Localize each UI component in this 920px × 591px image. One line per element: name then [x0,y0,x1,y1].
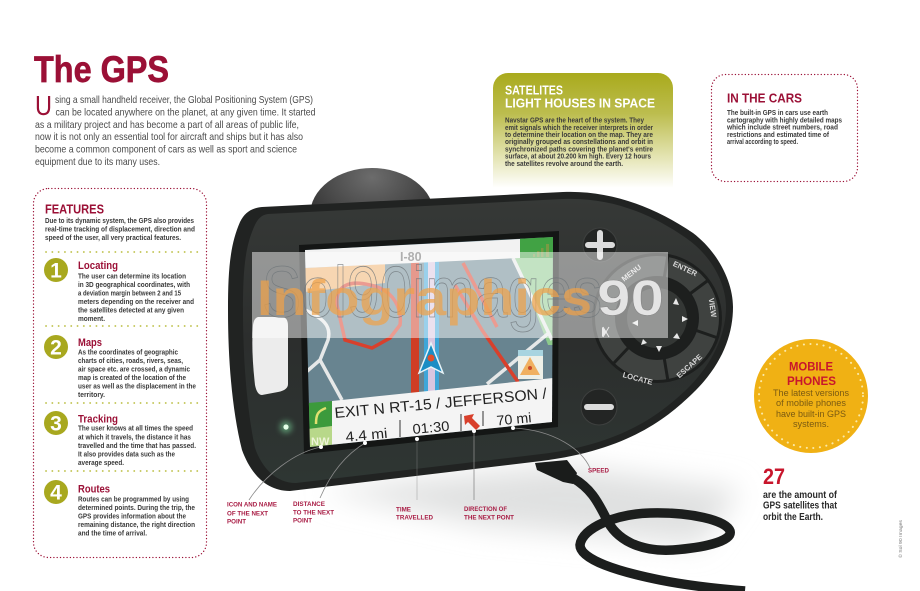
panel: in the cars: The built-in GPS in cars use earth [727,108,828,117]
label: distance: DISTANCE [293,501,326,508]
feature 1: locating: 1 [50,260,62,282]
label: direction: THE NEXT PONT [464,514,514,521]
intro text block: equipment due to its many uses. [35,157,160,168]
feature 1: locating: a deviation margin between 2 and 15 [78,288,181,298]
control dial: LOCATE [622,370,654,387]
watermark band: 90 [597,270,664,326]
label: distance [293,501,334,525]
position arrow [419,343,443,373]
feature 1: locating: moment. [78,314,105,323]
feature 3: tracking [44,411,196,467]
intro text block: can be located anywhere on the planet, at any given time. It started [56,108,316,118]
callout: mobile phones: have built-in GPS [776,409,846,420]
label: time travelled [396,506,433,522]
feature 2: maps: territory. [78,390,105,399]
panel: satellites: originally grouped as constellations and orbit in [505,137,653,146]
next point icon: NW [311,436,330,448]
status led [280,421,292,433]
intro text block: U [35,90,52,121]
intro text block: become a common component of cars as well as sport and science [35,144,297,156]
stat: 27 satellites: 27 [763,464,785,489]
feature 4: routes [44,480,195,538]
feature 2: maps: 2 [50,336,62,360]
panel: in the cars: restrictions and estimated time of [727,130,830,139]
panel: in the cars: which include street numbers, road [726,122,838,132]
label: distance: POINT [293,518,312,525]
device body [228,192,733,491]
antenna dome [310,168,434,262]
label: direction [464,506,514,521]
screen map [300,235,560,450]
features intro: Due to its dynamic system, the GPS also provides [45,216,194,225]
features intro [45,216,195,242]
intro text block: sing a small handheld receiver, the Global Positioning System (GPS) [55,95,313,106]
control dial [592,253,722,387]
side button [252,317,288,395]
feature 3: tracking: Tracking [78,414,118,426]
callout: mobile phones [754,339,868,453]
panel: satellites: surface, at about 20.200 km high. Every 12 hours [505,152,651,160]
next point icon [308,401,332,450]
control dial: ENTER [671,259,699,278]
label: icon and name: ICON AND NAME [227,502,278,509]
stat: 27 satellites: orbit the Earth. [763,512,823,523]
feature 2: maps: Maps [78,337,102,349]
feature 2: maps [44,335,196,399]
feature 3: tracking: at which it travels, the distance it has [78,432,191,442]
features intro: speed of the user, all very practical features. [45,233,181,242]
feature 1: locating: Locating [78,260,118,272]
panel: features [34,188,206,558]
feature 4: routes: determined points. During the trip, the [78,503,195,512]
ground shadow [320,465,740,545]
callout: mobile phones: The latest versions [773,388,849,399]
label: time travelled: TRAVELLED [396,515,433,522]
callout: mobile phones: systems. [793,419,829,430]
feature 4: routes: Routes can be programmed by using [78,494,189,504]
callout lines [249,426,590,500]
feature 4: routes: remaining distance, the right direction [78,520,195,529]
plus button [583,228,617,262]
feature 1: locating: the satellites detected at any given [78,306,184,314]
image credit: © Sol 90 Images [897,519,903,558]
features intro: real-time tracking of displacement, direction and [45,224,195,234]
callout: mobile phones: MOBILE [789,360,833,374]
feature 4: routes: and the time of arrival. [78,528,147,538]
feature 3: tracking: 3 [50,412,62,436]
panel: in the cars [712,74,858,182]
feature 2: maps: map is created of the location of the [78,373,186,382]
top road name bar [305,239,520,268]
label: icon and name: POINT [227,519,246,526]
feature 4: routes: 4 [50,482,62,504]
top road name bar: I-80 [400,250,422,264]
label: icon and name [227,502,278,526]
panel: satellites: LIGHT HOUSES IN SPACE [505,96,655,111]
feature 4: routes: GPS provides information about the [78,512,186,520]
panel: satellites: the satellites revolve around the earth. [505,159,623,168]
panel: satellites: emit signals which the receiver interprets in order [505,123,653,132]
feature 1: locating: meters depending on the receiver and [78,297,194,306]
feature 4: routes: Routes [78,484,110,496]
watermark band: Sol90images [262,253,602,333]
stat: 27 satellites: are the amount of [763,490,838,501]
label: time travelled: TIME [396,506,412,513]
signal indicator [520,237,553,258]
direction arrow [464,414,480,430]
screen map: 01:30 [412,418,450,437]
panel: satellites [493,73,673,188]
label: speed: SPEED [588,468,609,475]
feature 1: locating: in 3D geographical coordinates, with [78,280,190,289]
panel: in the cars: cartography with highly detailed maps [727,116,842,124]
intro text block: now it is not only an essential tool for aircraft and ships but it has also [35,132,303,143]
watermark band: Infographics [257,270,592,326]
panel: in the cars: arrival according to speed. [727,137,798,146]
panel: satellites: synchronized paths covering the planet's entire [505,144,653,154]
feature 3: tracking: The user knows at all times the speed [78,424,193,432]
panel: in the cars: IN THE CARS [727,91,802,106]
map poi icon [518,350,543,379]
feature 1: locating: The user can determine its location [78,272,186,280]
screen map: 70 mi [496,409,532,428]
panel: satellites: SATELITES [505,82,563,98]
panel: satellites: Navstar GPS are the heart of the system. They [505,116,644,124]
features heading: FEATURES [45,202,104,216]
feature 3: tracking: It also provides data such as the [78,450,175,458]
stat: 27 satellites [763,464,838,523]
label: icon and name: OF THE NEXT [227,510,268,517]
feature 1: locating [44,258,194,323]
info strip [332,378,553,448]
control dial: ESCAPE [675,352,704,380]
callout: mobile phones: PHONES [787,374,836,388]
feature 2: maps: As the coordinates of geographic [78,348,178,356]
power cable [535,460,745,591]
feature 2: maps: user as well as the displacement in the [78,382,196,390]
intro text block [35,90,316,168]
label: direction: DIRECTION OF [464,506,507,513]
control dial: VIEW [707,297,718,319]
screen bezel [299,231,559,454]
label: distance: TO THE NEXT [293,509,334,516]
control dial: MENU [620,262,643,283]
feature 3: tracking: average speed. [78,458,124,467]
stat: 27 satellites: GPS satellites that [763,500,838,512]
minus button [581,389,617,425]
callout: mobile phones: of mobile phones [776,398,846,409]
screen map: 4.4 mi [345,425,388,445]
title: The GPS [34,48,169,90]
intro text block: as a military project and has become a part of all areas of public life, [35,120,299,131]
panel: satellites: to determine their location on the map. They are [505,130,653,139]
illustration: GPS device [228,168,745,591]
feature 2: maps: air space etc. are crossed, a dynamic [78,364,190,374]
screen map: EXIT N RT-15 / JEFFERSON / [334,385,548,422]
feature 2: maps: charts of cities, roads, rivers, seas, [78,356,183,365]
feature 3: tracking: travelled and the time that has passed. [78,441,196,450]
